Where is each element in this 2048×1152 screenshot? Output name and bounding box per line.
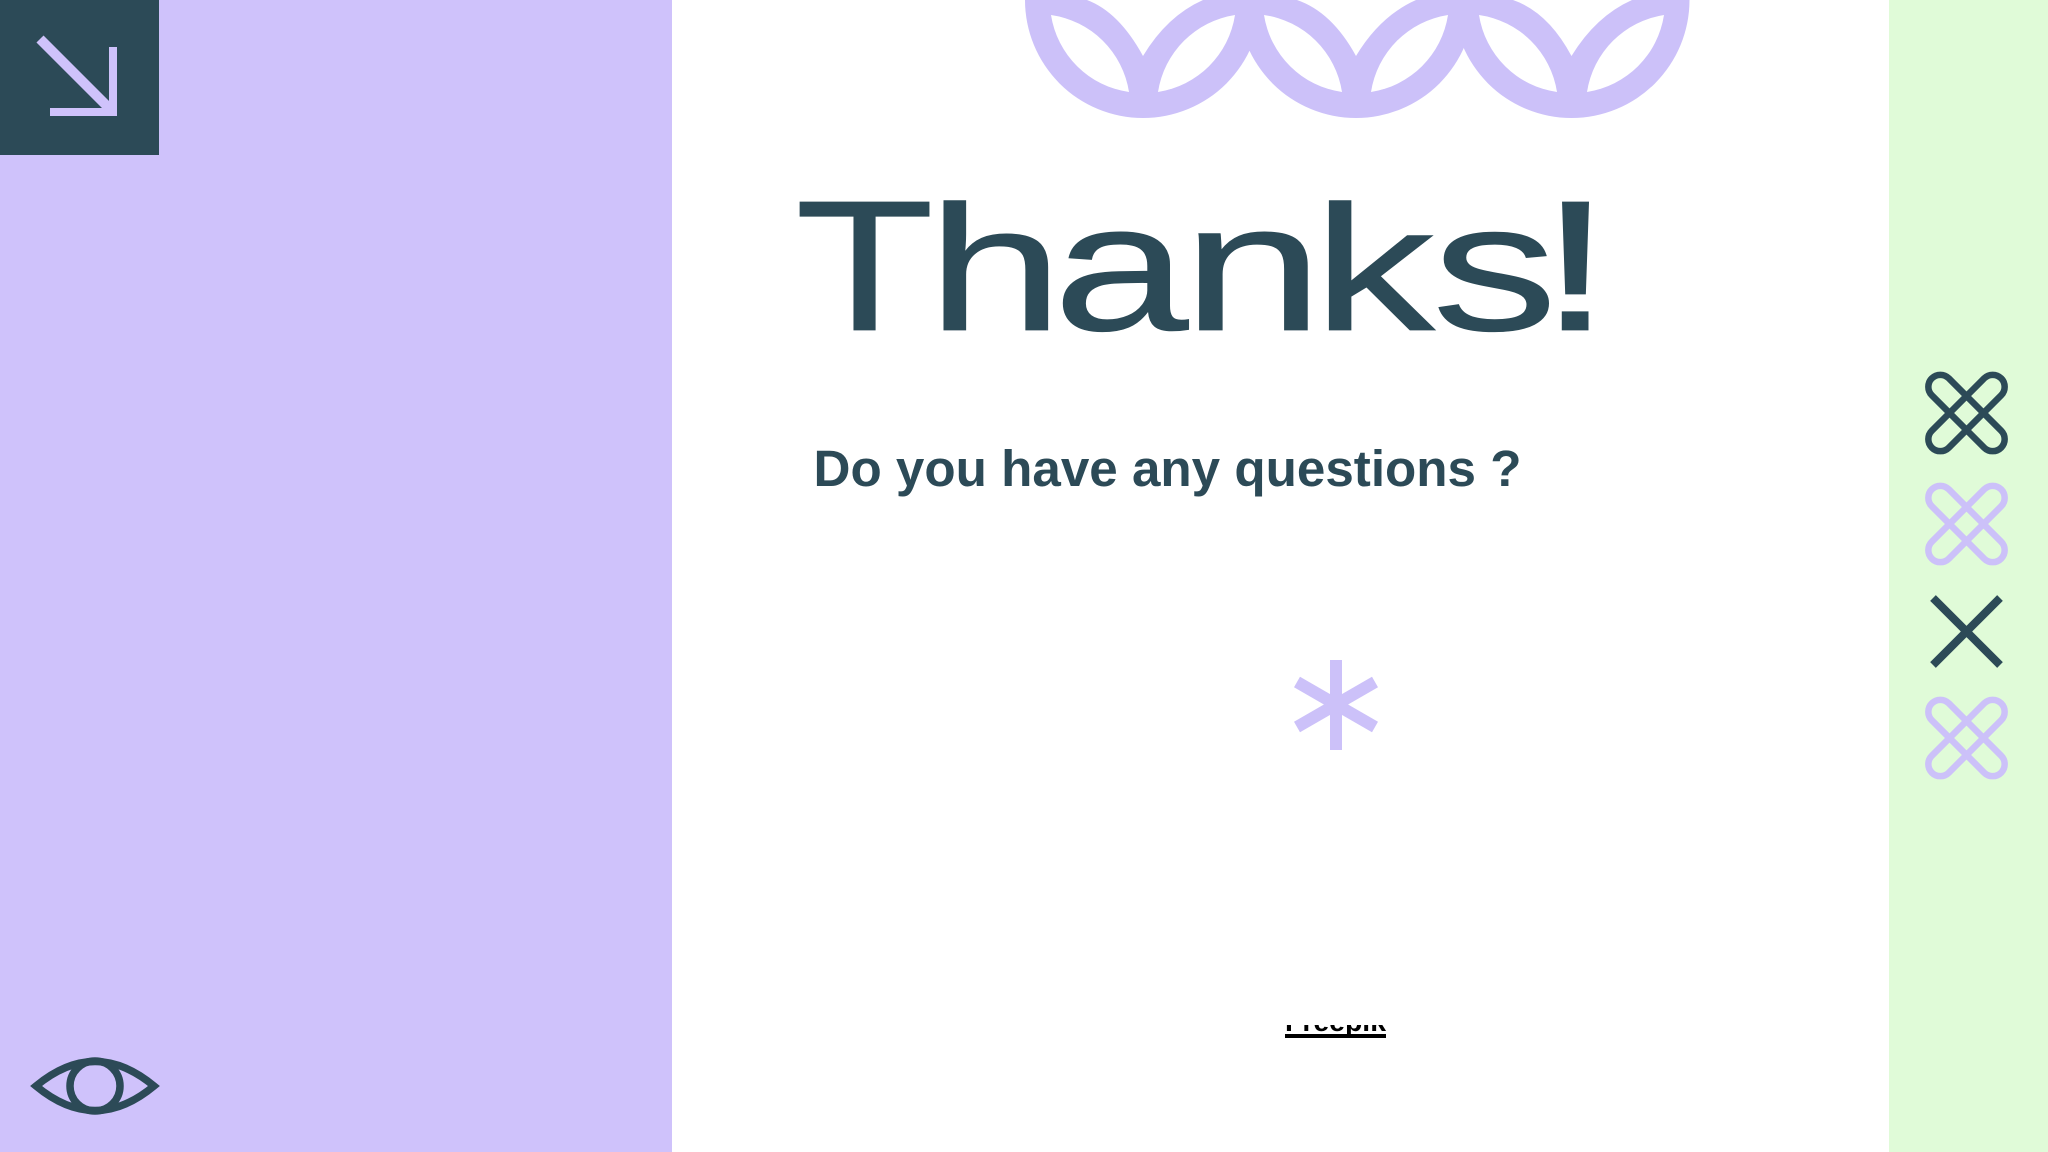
title: T bbox=[795, 163, 934, 370]
panel: right green bbox=[1889, 0, 2048, 1152]
title: s bbox=[1432, 166, 1558, 369]
title: h bbox=[927, 169, 1064, 368]
title bbox=[795, 162, 1613, 370]
icon: outlined cross purple bbox=[1923, 481, 2010, 567]
panel: left purple bbox=[0, 0, 672, 1152]
icon: outlined cross dark bbox=[1923, 370, 2010, 456]
subtitle question: Do you have any questions ? bbox=[814, 440, 1522, 497]
icon: outlined cross purple lower bbox=[1923, 695, 2010, 781]
icon: eye bbox=[36, 1061, 154, 1111]
title: n bbox=[1182, 165, 1324, 369]
ornament: top leaf circles bbox=[1025, 0, 1690, 118]
title: ! bbox=[1538, 162, 1613, 370]
title: a bbox=[1053, 165, 1189, 369]
icon: x mark dark bbox=[1933, 598, 2000, 665]
icon: asterisk bbox=[1297, 660, 1375, 750]
icon: arrow square bbox=[0, 0, 159, 155]
title: k bbox=[1313, 170, 1436, 368]
